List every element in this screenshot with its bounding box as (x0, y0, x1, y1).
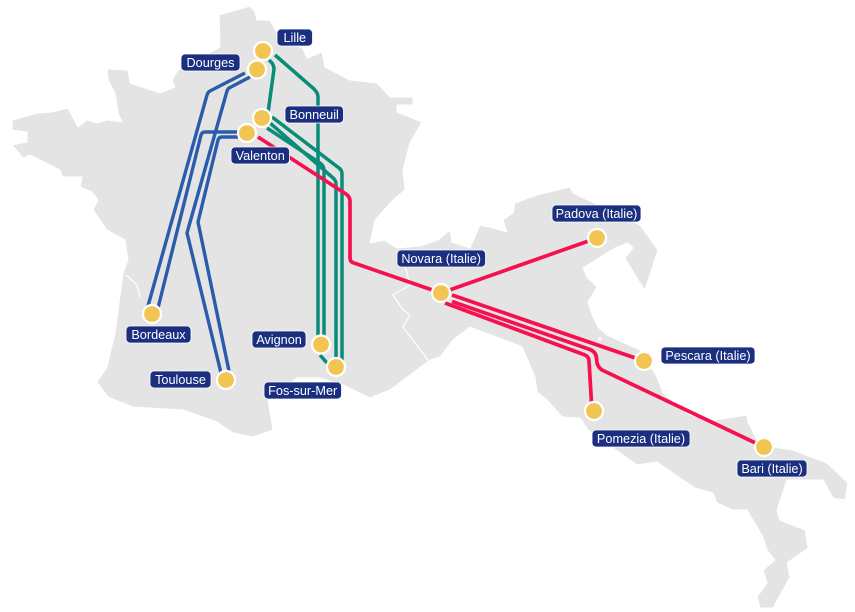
label: Pescara: Pescara (Italie) (665, 349, 751, 363)
label: Toulouse (150, 371, 211, 388)
label: Dourges: Dourges (187, 56, 234, 70)
label: Bordeaux (126, 326, 191, 343)
label: Lille (277, 29, 312, 46)
label: Novara: Novara (Italie) (401, 252, 481, 266)
label: Toulouse: Toulouse (155, 373, 206, 387)
label: Avignon (252, 331, 306, 348)
label: Valenton: Valenton (236, 149, 285, 163)
label: Bari: Bari (Italie) (741, 462, 803, 476)
routes: blue lines (148, 73, 250, 373)
label: Dourges (181, 54, 240, 71)
label: Pomezia: Pomezia (Italie) (597, 432, 685, 446)
routes: green lines (267, 55, 342, 363)
label: Bonneuil: Bonneuil (290, 108, 339, 122)
label: Bordeaux: Bordeaux (131, 328, 186, 342)
label: Lille: Lille (284, 31, 306, 45)
label: Bonneuil (285, 106, 344, 123)
label: Fos-sur-Mer: Fos-sur-Mer (268, 384, 338, 398)
label: Valenton (231, 147, 290, 164)
routes: red lines (258, 137, 764, 447)
site markers (143, 42, 773, 456)
label: Avignon: Avignon (256, 333, 302, 347)
label: Padova: Padova (Italie) (556, 207, 637, 221)
